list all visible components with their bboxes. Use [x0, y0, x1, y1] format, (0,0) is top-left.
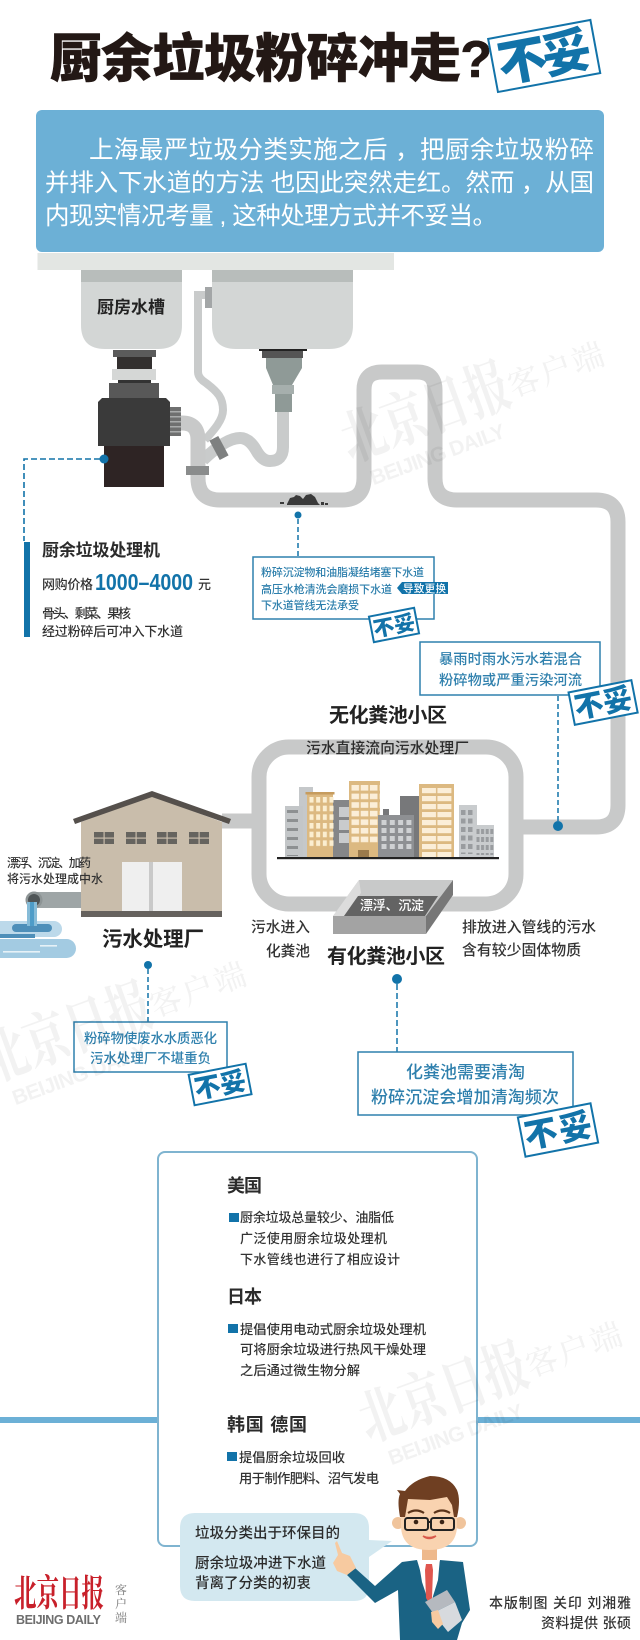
illustration: outflow pipe and water — [0, 892, 81, 958]
title: 厨余垃圾粉碎冲走? — [50, 31, 492, 89]
speech bubble — [180, 1513, 392, 1601]
speech bubble: 垃圾分类出于环保目的 — [195, 1524, 340, 1542]
label: discharge description — [462, 918, 596, 959]
watermark: upper: 北京日报 — [327, 338, 521, 479]
USA section: 美国 — [227, 1175, 262, 1196]
callout: septic dredging: 粉碎沉淀会增加清淘频次 — [371, 1088, 559, 1107]
watermark: middle: BEIJING DAILY — [9, 1040, 151, 1110]
credits: 本版制图 关印 刘湘雅 — [489, 1595, 631, 1611]
heading: sewage plant: 污水处理厂 — [102, 928, 204, 951]
price line: 元 — [198, 577, 211, 592]
icon: food waste disposer — [98, 350, 181, 487]
watermark: upper: BEIJING DAILY — [367, 420, 509, 490]
callout: clogged pipes: 粉碎沉淀物和油脂凝结堵塞下水道 — [261, 565, 424, 579]
Japan section: 可将厨余垃圾进行热风干燥处理 — [240, 1341, 426, 1357]
watermark: middle: 客户端 — [142, 949, 252, 1027]
Korea and Germany section: 用于制作肥料、沼气发电 — [239, 1471, 379, 1486]
disposer description — [42, 606, 183, 639]
logo: Beijing Daily: 户 — [115, 1595, 127, 1612]
callout: plant overload — [74, 961, 227, 1072]
stamp: clog: 不妥 — [371, 611, 417, 642]
tag: leads to replacement: 导致更换 — [403, 582, 446, 595]
credits: 资料提供 张硕 — [541, 1615, 631, 1631]
callout: rainstorm pollution: 暴雨时雨水污水若混合 — [439, 651, 582, 668]
logo: Beijing Daily — [14, 1563, 127, 1627]
callout: clogged pipes — [253, 512, 448, 619]
Japan section: 日本 — [227, 1287, 262, 1307]
pipes: main sewage line — [178, 372, 618, 904]
divider band behind the country box — [0, 1417, 640, 1423]
heading: no septic tank community: 无化粪池小区 — [329, 704, 447, 727]
illustration: presenter — [333, 1476, 470, 1640]
price line: 网购价格 — [42, 577, 93, 592]
label: treatment description: 漂浮、沉淀、加药 — [7, 855, 91, 870]
callout: rainstorm pollution: 粉碎物或严重污染河流 — [439, 672, 582, 689]
watermark: lower: 北京日报 — [345, 1318, 539, 1459]
callout: disposer info — [24, 454, 211, 639]
Korea and Germany section — [227, 1414, 379, 1486]
callout: septic dredging — [358, 974, 573, 1115]
label: sewage enters septic tank: 化粪池 — [266, 943, 310, 960]
Japan section — [227, 1287, 427, 1378]
callout: plant overload: 污水处理厂不堪重负 — [90, 1051, 211, 1066]
logo: Beijing Daily: 客 — [115, 1581, 127, 1598]
USA section: 广泛使用厨余垃圾处理机 — [240, 1231, 387, 1246]
kitchen sink label: 厨房水槽 — [97, 298, 165, 317]
watermark: lower: BEIJING DAILY — [385, 1400, 527, 1470]
label: treatment description — [7, 855, 103, 886]
stamp: septic: 不妥 — [521, 1106, 595, 1155]
label: discharge description: 含有较少固体物质 — [462, 941, 581, 959]
Japan section: 提倡使用电动式厨余垃圾处理机 — [240, 1321, 427, 1337]
icon: sink drain fitting — [259, 349, 307, 412]
disposer description: 骨头、剩菜、果核 — [42, 606, 131, 621]
stamp: title 不妥: 不妥 — [493, 23, 596, 93]
septic tank label: 漂浮、沉淀 — [360, 898, 424, 913]
USA section — [227, 1175, 400, 1267]
watermark: lower: 客户端 — [518, 1309, 628, 1387]
icon: sediment clog — [280, 494, 328, 505]
USA section: 下水管线也进行了相应设计 — [240, 1252, 400, 1267]
logo: Beijing Daily: 端 — [115, 1609, 127, 1626]
label: sewage flows directly: 污水直接流向污水处理厂 — [306, 740, 469, 757]
label: sewage enters septic tank: 污水进入 — [251, 919, 310, 936]
disposer description: 经过粉碎后可冲入下水道 — [42, 624, 183, 639]
Japan section: 之后通过微生物分解 — [240, 1362, 360, 1378]
panel: intro: 内现实情况考量 , 这种处理方式并不妥当。 — [45, 202, 497, 230]
logo: Beijing Daily: 北京日报 — [14, 1563, 104, 1617]
heading: septic tank community: 有化粪池小区 — [327, 945, 445, 968]
callout: plant overload: 粉碎物使废水水质恶化 — [84, 1031, 217, 1046]
panel: intro: 并排入下水道的方法 也因此突然走红。然而 ，从国 — [45, 169, 594, 197]
hose nub and connectors — [186, 287, 229, 475]
callout: rainstorm pollution — [420, 642, 600, 831]
panel: intro — [36, 110, 604, 252]
USA section: 厨余垃圾总量较少、油脂低 — [240, 1210, 394, 1225]
label: treatment description: 将污水处理成中水 — [7, 871, 103, 886]
price line: 1000–4000 — [95, 569, 193, 595]
watermark: upper: 客户端 — [500, 329, 610, 407]
Korea and Germany section: 韩国 德国 — [227, 1414, 307, 1435]
disposer heading: 厨余垃圾处理机 — [42, 540, 160, 560]
speech bubble: 厨余垃圾冲进下水道 — [195, 1554, 326, 1572]
illustration: city buildings — [277, 781, 499, 859]
credits — [489, 1595, 631, 1631]
Korea and Germany section: 提倡厨余垃圾回收 — [239, 1449, 345, 1465]
label: sewage enters septic tank — [251, 919, 310, 960]
callout: clogged pipes: 下水道管线无法承受 — [261, 598, 359, 612]
panel: overseas practices — [158, 1152, 477, 1546]
pipes: dishwasher hose and trap — [198, 295, 283, 461]
stamp: rainstorm: 不妥 — [572, 682, 635, 725]
speech bubble: 背离了分类的初衷 — [195, 1574, 311, 1592]
logo: Beijing Daily: BEIJING DAILY — [16, 1613, 102, 1627]
price line — [42, 569, 211, 595]
label: discharge description: 排放进入管线的污水 — [462, 918, 596, 936]
callout: septic dredging: 化粪池需要清淘 — [406, 1063, 525, 1082]
countertop and sinks — [38, 253, 394, 349]
panel: intro: 上海最严垃圾分类实施之后 ，把厨余垃圾粉碎 — [89, 136, 594, 164]
illustration: sewage treatment plant — [73, 791, 231, 917]
callout: clogged pipes: 高压水枪清洗会磨损下水道 — [261, 582, 392, 596]
stamp: plant: 不妥 — [192, 1065, 249, 1105]
illustration: septic tank — [333, 880, 453, 934]
